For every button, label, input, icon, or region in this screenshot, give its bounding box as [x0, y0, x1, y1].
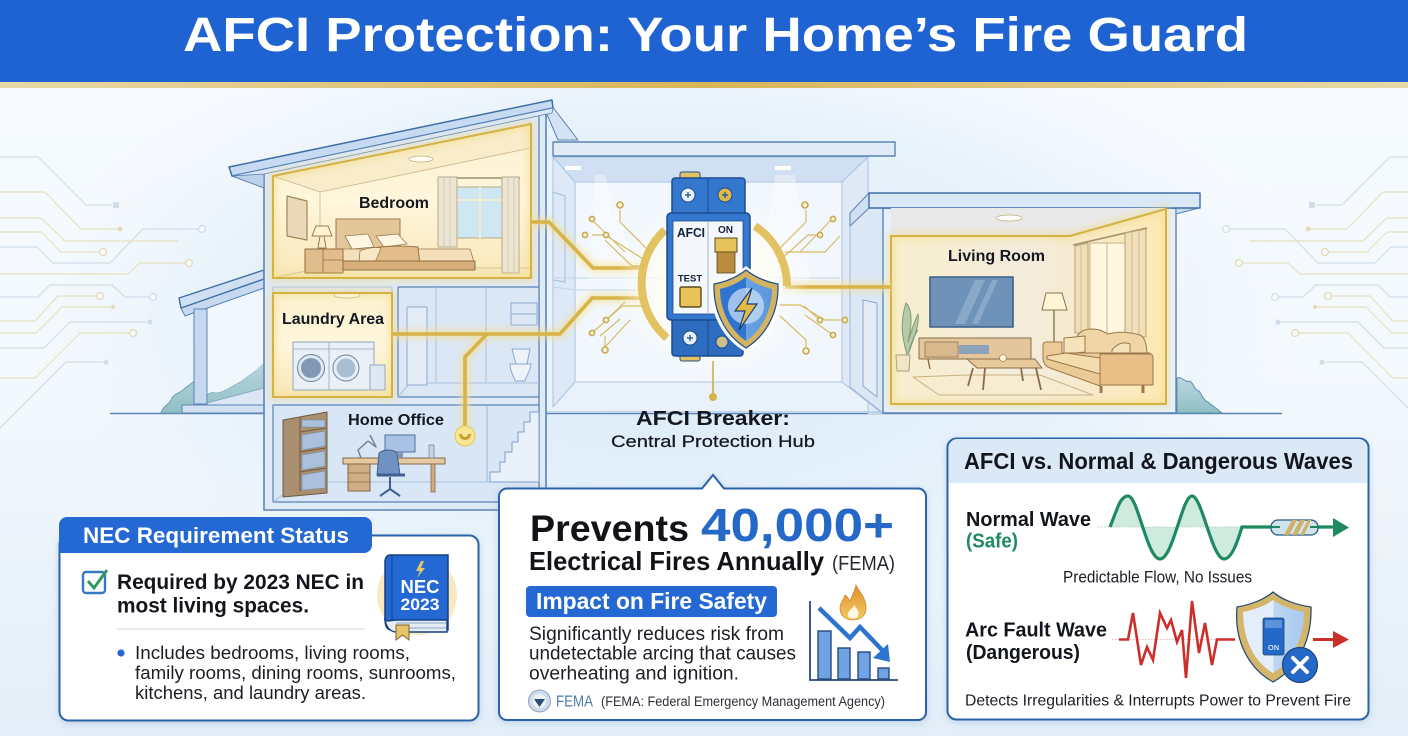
coffee table	[967, 354, 1042, 390]
on switch	[715, 238, 737, 273]
rug	[913, 375, 1093, 395]
desk	[343, 435, 445, 492]
living room label: Living Room	[948, 248, 1045, 265]
key statistic: 40,000+	[701, 499, 894, 551]
chart: falling fires bars	[810, 585, 898, 680]
tab heading: NEC Requirement Status	[83, 523, 349, 548]
included rooms list: Includes bedrooms, living rooms,	[135, 643, 410, 663]
hub label: AFCI Breaker:	[636, 408, 790, 430]
main two-storey block	[229, 100, 578, 510]
gold ring	[642, 226, 787, 338]
requirement statement: most living spaces.	[117, 594, 309, 618]
impact text: undetectable arcing that causes	[529, 644, 796, 664]
key statistic: Prevents	[530, 508, 689, 549]
key statistic	[529, 499, 895, 576]
icon: flame	[840, 585, 866, 620]
panel heading	[949, 439, 1367, 483]
television	[930, 277, 1013, 327]
laundry area	[273, 287, 392, 397]
media console	[919, 338, 1031, 369]
breaker device: TEST	[678, 274, 702, 284]
included rooms list: kitchens, and laundry areas.	[135, 683, 366, 703]
title: AFCI Protection: Your Home’s Fire Guard	[183, 9, 1248, 62]
impact text	[529, 624, 796, 684]
centre section	[546, 142, 895, 414]
arc fault label: Arc Fault Wave	[965, 620, 1107, 642]
bedroom	[273, 124, 531, 278]
breaker labels: AFCI	[677, 225, 705, 240]
shield with bolt	[710, 266, 782, 352]
panel: fires prevented	[499, 475, 926, 720]
gold wiring to rooms	[392, 222, 891, 446]
icon: NEC 2023 code book: 2023	[400, 595, 440, 614]
hub label: Central Protection Hub	[611, 432, 815, 451]
bed	[336, 219, 475, 270]
stairs	[490, 412, 539, 482]
laundry label: Laundry Area	[282, 311, 384, 328]
tab heading	[59, 517, 372, 553]
icon: shield with switch	[1237, 592, 1318, 682]
bedroom label: Bedroom	[359, 195, 429, 212]
chart: arc fault wave	[1112, 601, 1349, 678]
FEMA source line	[528, 690, 885, 712]
home office	[273, 405, 539, 502]
living room wing	[850, 193, 1200, 413]
panel: NEC requirement status	[59, 517, 478, 720]
included rooms list: family rooms, dining rooms, sunrooms,	[135, 663, 456, 683]
normal wave label	[966, 509, 1091, 552]
chart: normal sine wave	[1098, 496, 1349, 559]
requirement statement: Required by 2023 NEC in	[117, 571, 364, 594]
house cutaway	[110, 100, 1282, 510]
floor lamp	[1042, 293, 1067, 342]
FEMA source line: FEMA	[556, 694, 594, 710]
impact text: overheating and ignition.	[529, 664, 739, 684]
normal wave label: (Safe)	[966, 530, 1018, 552]
bedroom window	[438, 177, 520, 273]
nightstand and lamp	[305, 226, 343, 273]
office label: Home Office	[348, 412, 444, 429]
key statistic: (FEMA)	[832, 553, 895, 575]
arc fault label: (Dangerous)	[966, 642, 1080, 664]
icon: check box	[83, 570, 107, 593]
living room window and curtains	[1073, 228, 1147, 337]
AFCI breaker hub	[582, 172, 848, 451]
ground line and bushes	[110, 360, 1282, 414]
screws	[681, 188, 732, 348]
icon: NEC 2023 code book: NEC	[400, 577, 440, 597]
bedroom picture	[287, 196, 307, 240]
washer and dryer	[293, 342, 385, 390]
connector stem	[709, 361, 717, 401]
icon: NEC 2023 code book	[377, 555, 457, 640]
porch	[179, 270, 264, 413]
circuit traces around breaker	[582, 202, 848, 354]
arc fault label	[965, 620, 1107, 664]
test button	[680, 287, 701, 307]
circuit traces right	[1222, 157, 1408, 428]
FEMA source line: (FEMA: Federal Emergency Management Agency)	[601, 694, 885, 709]
normal wave caption: Predictable Flow, No Issues	[1063, 568, 1252, 586]
header banner	[0, 0, 1408, 88]
impact heading: Impact on Fire Safety	[536, 588, 767, 614]
key statistic: Electrical Fires Annually	[529, 546, 825, 576]
arc fault caption: Detects Irregularities & Interrupts Power to Prevent Fire	[965, 692, 1351, 710]
circuit traces left	[0, 157, 206, 428]
icon: protected wire	[1271, 520, 1318, 535]
sofa	[1043, 329, 1153, 393]
middle utility room	[398, 287, 539, 397]
panel heading: AFCI vs. Normal & Dangerous Waves	[964, 448, 1353, 474]
icon: shield with switch: ON	[1268, 643, 1279, 652]
toilet	[510, 349, 531, 381]
bookcase	[283, 412, 327, 497]
requirement statement	[117, 571, 364, 618]
panel: wave comparison	[948, 438, 1368, 720]
office chair	[377, 450, 405, 496]
impact text: Significantly reduces risk from	[529, 624, 784, 645]
normal wave label: Normal Wave	[966, 509, 1091, 531]
plant	[896, 303, 918, 371]
breaker device: ON	[718, 225, 733, 236]
hub label	[611, 408, 815, 451]
breaker device	[667, 172, 750, 361]
wire terminal	[455, 426, 475, 446]
included rooms list	[117, 643, 456, 703]
